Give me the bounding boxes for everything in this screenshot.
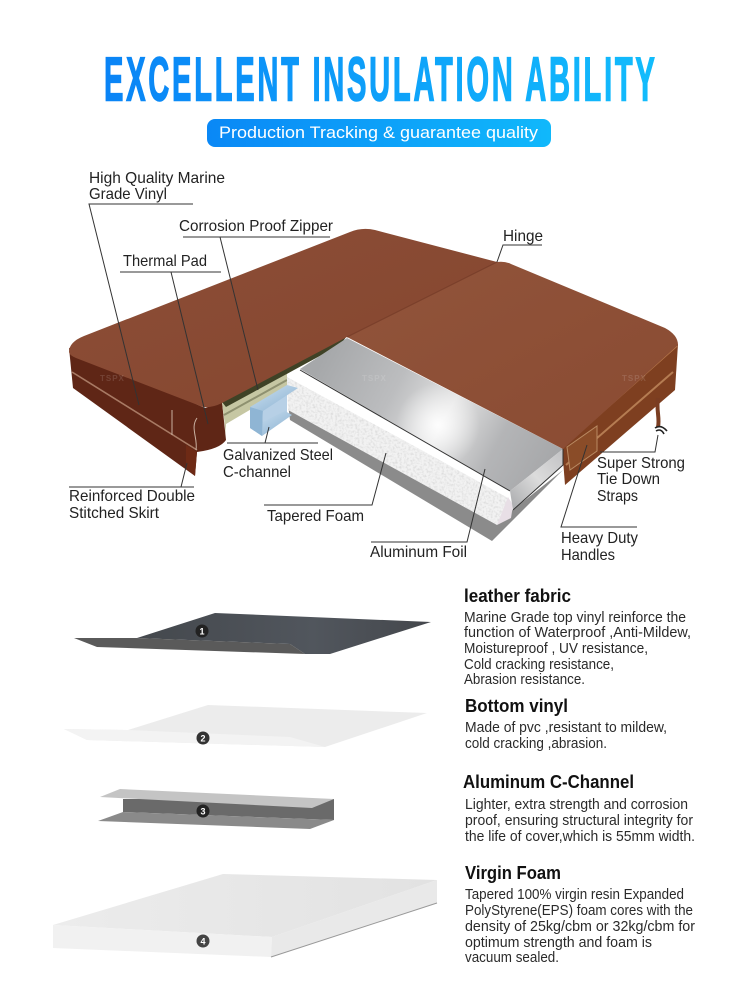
- subtitle pill: [207, 119, 551, 147]
- label: high quality marine grade vinyl: [89, 170, 225, 405]
- handle: [567, 426, 597, 470]
- label: tapered foam: [264, 453, 386, 525]
- tapered foam: [287, 368, 513, 525]
- label: super strong tie down straps: Straps: [597, 488, 638, 505]
- text block: aluminum c-channel: [463, 772, 695, 845]
- text block: virgin foam: vacuum sealed.: [465, 950, 559, 966]
- text block: bottom vinyl: Bottom vinyl: [465, 696, 568, 716]
- text block: virgin foam: Virgin Foam: [465, 863, 561, 883]
- thermal pad and zipper strip: [222, 336, 347, 434]
- hinge seam: [347, 262, 497, 337]
- layer 2: bottom vinyl sheet: 2: [200, 734, 206, 744]
- bottom aluminium sheet: [288, 404, 563, 541]
- text block: virgin foam: [465, 863, 695, 966]
- label: reinforced double stitched skirt: [69, 463, 195, 522]
- text block: aluminum c-channel: proof, ensuring structural integrity for: [465, 813, 693, 829]
- label: tapered foam: Tapered Foam: [267, 508, 364, 525]
- layer 3: aluminum C-channel: [98, 789, 334, 829]
- galvanized steel C-channel: [250, 385, 298, 436]
- layer 4: virgin foam board: [53, 874, 437, 957]
- text block: bottom vinyl: cold cracking ,abrasion.: [465, 736, 607, 752]
- right side of cover: [562, 344, 678, 485]
- text block: aluminum c-channel: Lighter, extra strength and corrosion: [465, 797, 688, 813]
- label: reinforced double stitched skirt: Reinforced Double: [69, 488, 195, 505]
- label: corrosion proof zipper: Corrosion Proof Zipper: [179, 218, 333, 235]
- watermarks: TSPX: [622, 374, 647, 383]
- label: thermal pad: [120, 253, 221, 424]
- label: heavy duty handles: Handles: [561, 547, 615, 564]
- layer 1: leather fabric sheet: 1: [199, 626, 205, 636]
- layer 2: bottom vinyl sheet: [64, 705, 427, 747]
- layer 3: aluminum C-channel: 3: [200, 806, 206, 816]
- text block: aluminum c-channel: Aluminum C-Channel: [463, 772, 634, 792]
- text block: virgin foam: Tapered 100% virgin resin Expanded: [465, 887, 684, 903]
- label: high quality marine grade vinyl: Grade Vinyl: [89, 186, 167, 203]
- label: super strong tie down straps: [597, 435, 685, 505]
- label: high quality marine grade vinyl: High Quality Marine: [89, 170, 225, 187]
- label: reinforced double stitched skirt: Stitched Skirt: [69, 505, 160, 522]
- aluminium foil: [300, 338, 563, 510]
- text block: leather fabric: Marine Grade top vinyl reinforce the: [464, 610, 686, 626]
- panel: hot tub cover cutaway diagram: [69, 170, 685, 564]
- layer 4: virgin foam board: 4: [200, 936, 206, 946]
- text block: bottom vinyl: Made of pvc ,resistant to mildew,: [465, 720, 667, 736]
- text block: leather fabric: Abrasion resistance.: [464, 672, 585, 688]
- label: galvanized steel c-channel: [223, 427, 333, 481]
- label: hinge: [497, 228, 543, 262]
- text block: leather fabric: Cold cracking resistance,: [464, 657, 614, 673]
- label: aluminum foil: [370, 469, 485, 561]
- label: corrosion proof zipper: [179, 218, 333, 390]
- subtitle pill: Production Tracking & guarantee quality: [219, 123, 539, 142]
- label: heavy duty handles: [561, 445, 638, 564]
- right lid panel: [347, 262, 678, 449]
- text block: virgin foam: PolyStyrene(EPS) foam cores with the: [465, 903, 693, 919]
- text block: aluminum c-channel: the life of cover,which is 55mm width.: [465, 829, 695, 845]
- text block: leather fabric: Moistureproof , UV resistance,: [464, 641, 648, 657]
- label: galvanized steel c-channel: C-channel: [223, 464, 291, 481]
- text block: leather fabric: function of Waterproof ,Anti-Mildew,: [464, 625, 691, 641]
- title: EXCELLENT INSULATION ABILITY: [104, 45, 655, 115]
- label: heavy duty handles: Heavy Duty: [561, 530, 638, 547]
- layer 1: leather fabric sheet: [74, 613, 431, 654]
- label: super strong tie down straps: Tie Down: [597, 471, 660, 488]
- left lid panel: [69, 229, 497, 407]
- text block: bottom vinyl: [465, 696, 667, 752]
- label: thermal pad: Thermal Pad: [123, 253, 207, 270]
- label: super strong tie down straps: Super Strong: [597, 455, 685, 472]
- text block: leather fabric: [464, 586, 691, 688]
- label: hinge: Hinge: [503, 228, 543, 245]
- text block: virgin foam: density of 25kg/cbm or 32kg/cbm for: [465, 919, 695, 935]
- watermarks: TSPX: [100, 374, 125, 383]
- label: galvanized steel c-channel: Galvanized Steel: [223, 447, 333, 464]
- text block: virgin foam: optimum strength and foam is: [465, 935, 652, 951]
- left side and skirt of cover: [69, 348, 226, 476]
- watermarks: [100, 374, 647, 383]
- watermarks: TSPX: [362, 374, 387, 383]
- label: aluminum foil: Aluminum Foil: [370, 544, 467, 561]
- text block: leather fabric: leather fabric: [464, 586, 571, 606]
